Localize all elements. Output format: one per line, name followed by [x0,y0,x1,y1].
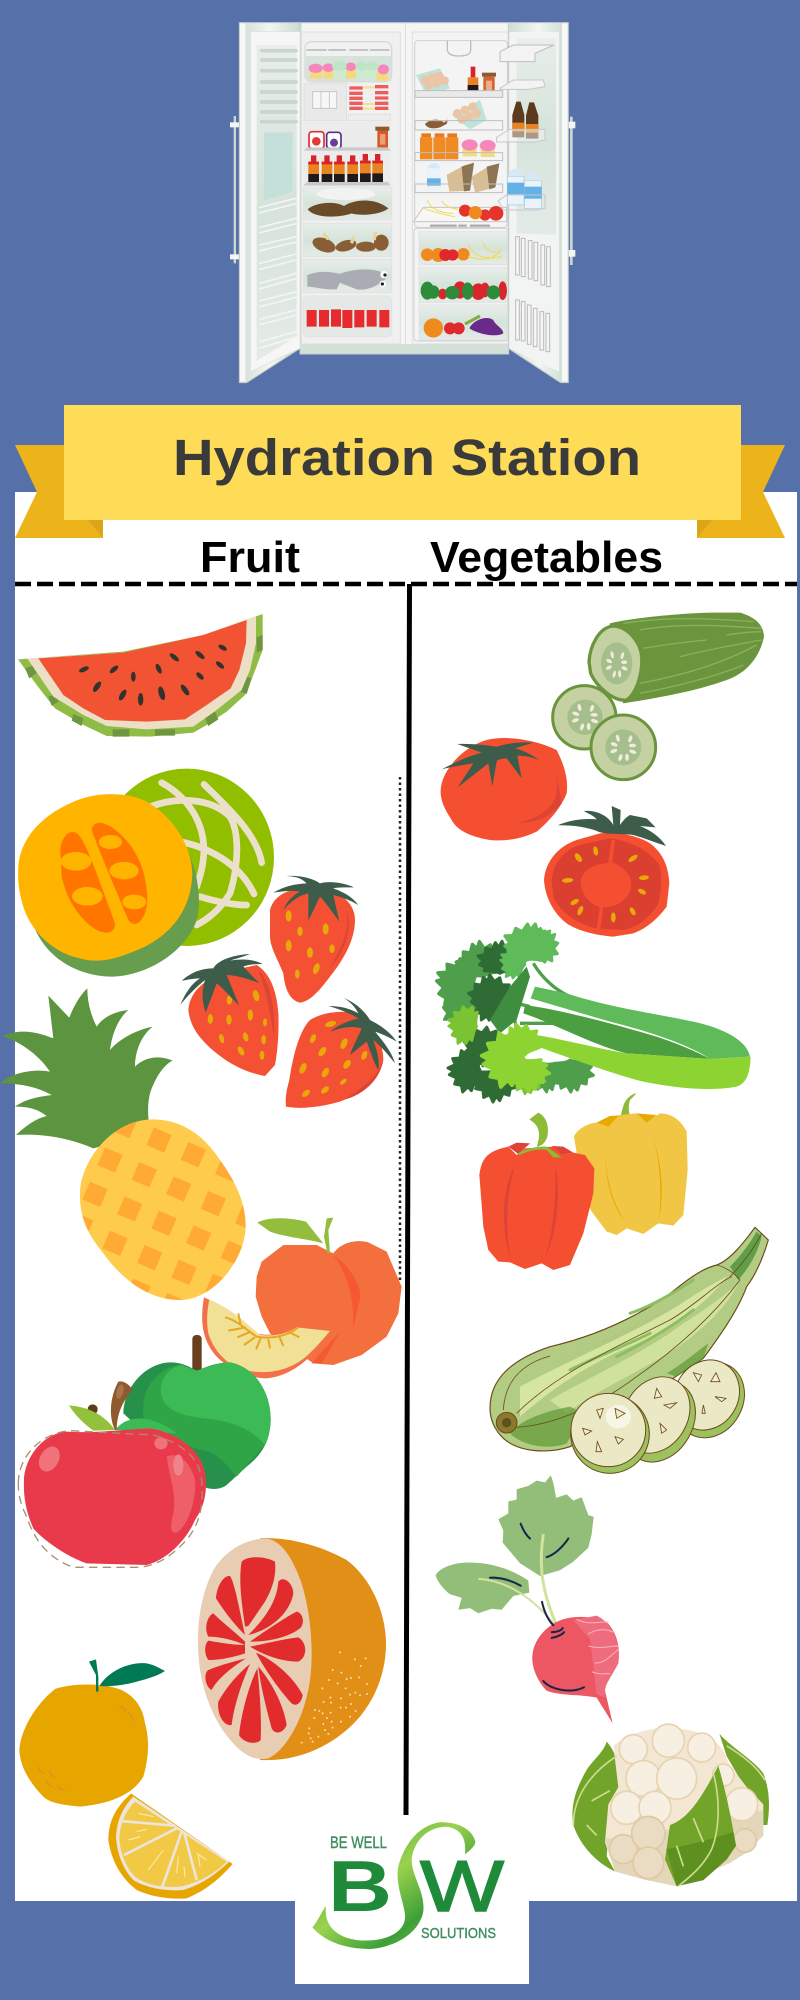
logo letter B: B [328,1847,392,1927]
logo text: solutions: SOLUTIONS [421,1926,496,1942]
vegetable: radish [436,1475,619,1723]
logo text: be well: BE WELL [330,1834,387,1852]
fridge handles [230,116,575,265]
heading: vegetables: Vegetables [430,533,663,582]
fruit: watermelon [18,614,263,737]
title banner [64,405,741,520]
logo panel [295,1815,529,1984]
vegetable: cut tomato [544,806,669,937]
right compartment contents [413,41,508,341]
pineapple crown [0,988,173,1148]
white content panel [15,492,797,1901]
fruit: strawberries [180,876,397,1108]
vegetable: red pepper [479,1113,594,1270]
ribbon tail right [697,445,785,538]
vegetable: yellow pepper [574,1093,688,1235]
fruit: red apple [18,1381,206,1567]
fruit: melons [18,769,274,977]
ribbon tail left [15,445,103,538]
fridge cabinet [300,23,509,354]
vegetable: cucumber [553,613,764,780]
vegetable: whole tomato [441,738,567,840]
fruit: green apple [115,1335,271,1489]
right door [497,23,568,383]
heading: fruit: Fruit [200,533,300,582]
vegetable: zucchini [490,1227,768,1475]
title: Hydration Station [173,429,641,486]
fruit: orange [19,1659,165,1807]
fruit: grapefruit [198,1538,386,1760]
left door [239,23,300,383]
fruit: lemon slice [108,1793,233,1899]
left compartment contents [303,42,392,337]
logo letter W: W [420,1847,504,1927]
vegetable: cauliflower [572,1724,769,1886]
vegetable: celery [428,919,751,1102]
logo swoosh [312,1822,475,1949]
fruit: peach [202,1218,402,1378]
pineapple body [80,1119,246,1300]
fruit: pineapple [0,988,246,1300]
illustration: open refrigerator [230,23,575,383]
